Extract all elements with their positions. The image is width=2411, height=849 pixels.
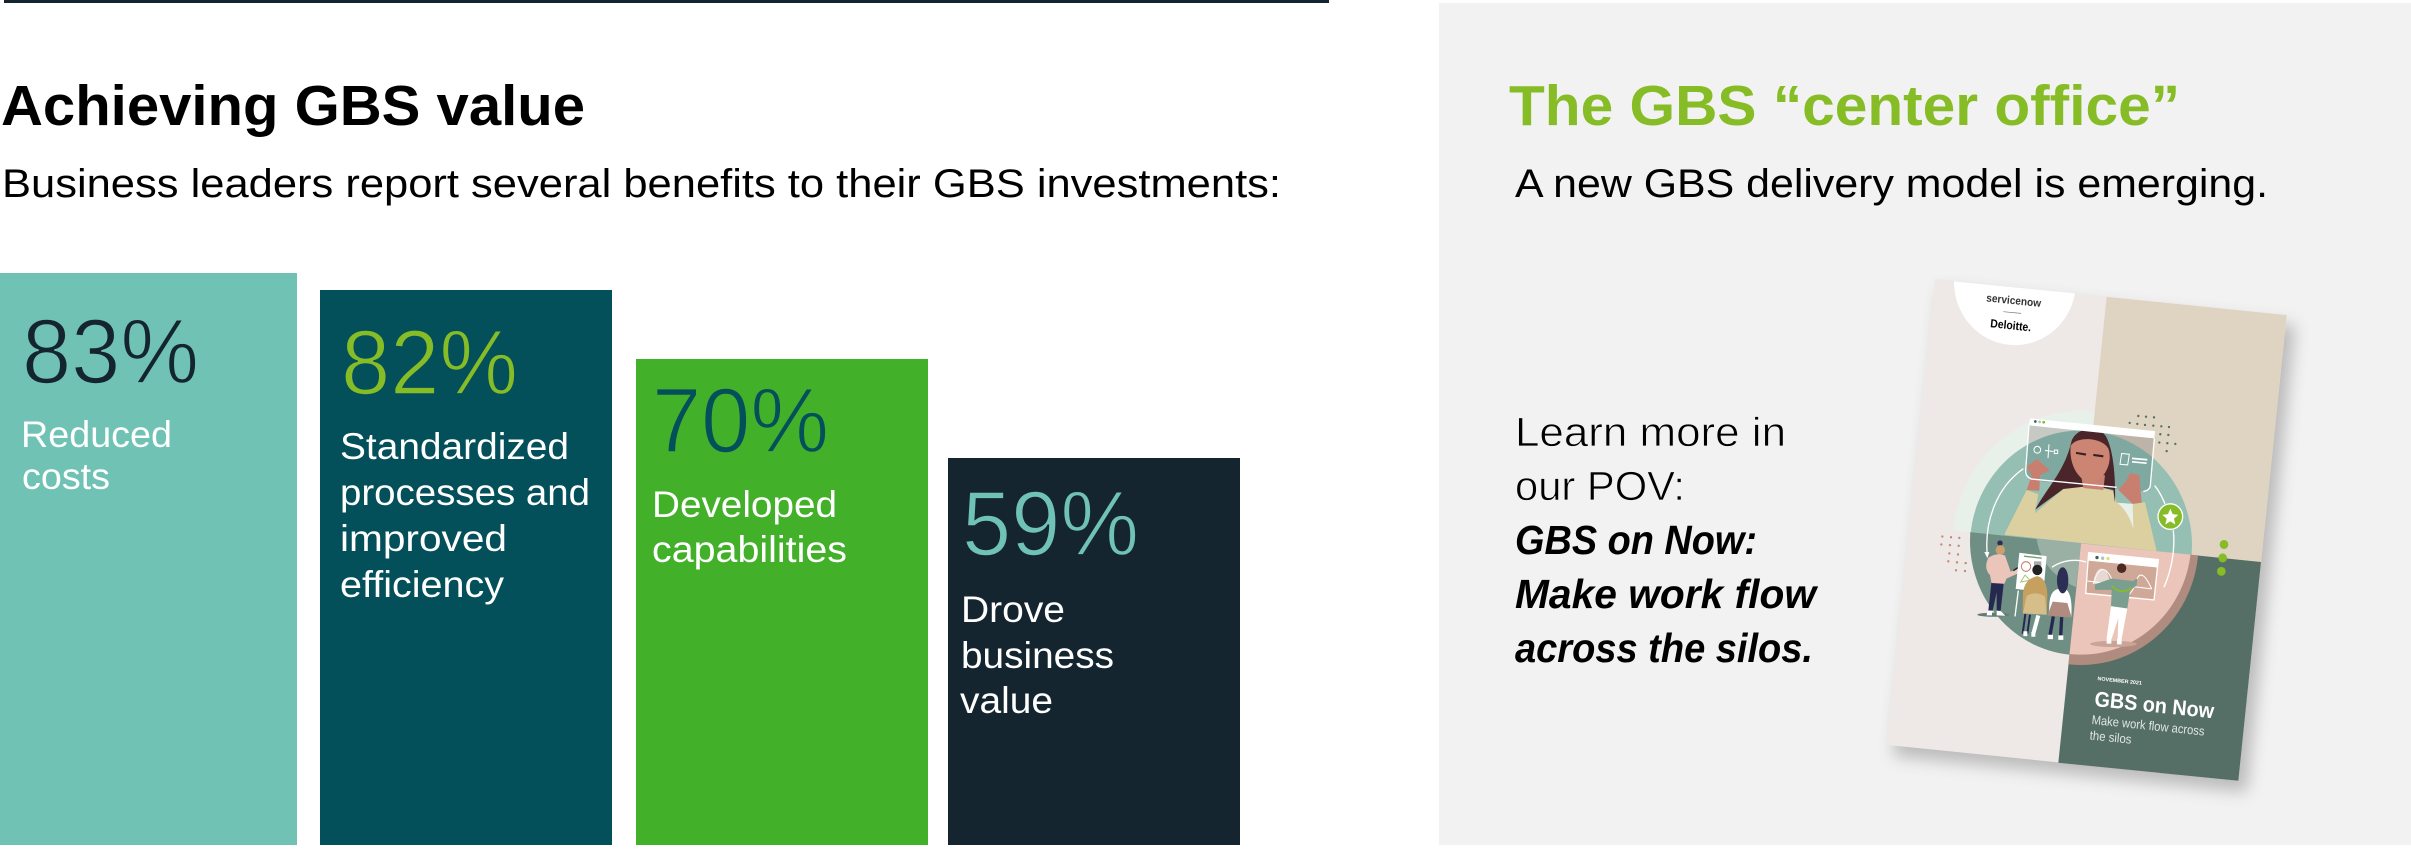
- woman illustration: [2005, 429, 2157, 551]
- bar: 83% reduced costs: 83%: [22, 301, 199, 403]
- gap next to sleeve: [2117, 503, 2133, 529]
- text block: learn more: across the silos.: [1515, 625, 1813, 671]
- bar: 82% standardized processes: processes and: [340, 472, 590, 513]
- bar: 82% standardized processes: efficiency: [340, 564, 505, 605]
- face: [2070, 439, 2110, 483]
- bar: 59% drove business value: 59%: [962, 473, 1139, 575]
- heading: Achieving GBS value: Achieving GBS value: [1, 74, 585, 138]
- tan quadrant: [2081, 297, 2287, 562]
- pink lower right disc: [2070, 544, 2190, 655]
- dark lower left disc: [1970, 532, 2081, 655]
- report cover: [1887, 279, 2295, 792]
- cover text: NOVEMBER 2021: [2097, 676, 2142, 687]
- analyst with chart window: [2086, 553, 2158, 647]
- bar: 59% drove business value: value: [960, 680, 1053, 721]
- neck: [2081, 474, 2105, 490]
- logo area: [1954, 281, 2075, 345]
- cover text: Make work flow across: [2091, 713, 2205, 739]
- bar: 83% reduced costs: costs: [22, 456, 110, 497]
- bar: 83% reduced costs: [0, 273, 297, 845]
- star badge: [2157, 503, 2183, 530]
- bar: 82% standardized processes: improved: [340, 518, 507, 559]
- presenter: [1997, 540, 2003, 546]
- heading: GBS center office: The GBS “center office”: [1509, 74, 2180, 138]
- pale halo: [2093, 414, 2094, 424]
- sweater: [2005, 486, 2157, 551]
- bar: 59% drove business value: Drove: [961, 589, 1065, 630]
- cover text: GBS on Now: [2094, 688, 2216, 723]
- right hand: [2118, 473, 2142, 504]
- eyes: [2076, 453, 2103, 456]
- logo area: Deloitte.: [1990, 318, 2032, 334]
- text block: learn more: [1515, 409, 1819, 671]
- flip chart: [2016, 553, 2047, 592]
- bar: 59% drove business value: [948, 458, 1240, 845]
- text block: learn more: Learn more in: [1515, 409, 1786, 455]
- dark green quadrant: [2058, 543, 2261, 781]
- text block: learn more: GBS on Now:: [1515, 517, 1757, 563]
- bar: 70% developed capabilities: capabilities: [652, 529, 847, 570]
- text block: learn more: our POV:: [1515, 463, 1685, 509]
- bar: 82% standardized processes: 82%: [341, 312, 518, 414]
- bar: 70% developed capabilities: [636, 359, 928, 845]
- text block: learn more: Make work flow: [1515, 571, 1819, 617]
- bar: 82% standardized processes: Standardized: [340, 426, 569, 467]
- dot grid upper right: [2128, 415, 2176, 452]
- teal upper disc: [1970, 430, 2192, 555]
- cover text: [2089, 676, 2216, 747]
- window frame: [2026, 418, 2155, 491]
- bar: 70% developed capabilities: Developed: [652, 484, 837, 525]
- cover text: the silos: [2089, 728, 2132, 747]
- subheading: new delivery model: A new GBS delivery model is emerging.: [1515, 162, 2268, 206]
- bar: 59% drove business value: business: [961, 635, 1114, 676]
- cover page: [1887, 279, 2287, 781]
- rim lower right: [2068, 554, 2198, 665]
- bar: 70% developed capabilities: 70%: [652, 370, 829, 472]
- screen window: [2024, 426, 2154, 491]
- cycle arrows: [1984, 469, 2174, 587]
- seated person two: [2049, 589, 2072, 616]
- light wedge: [2037, 539, 2081, 587]
- cover shadow: [1893, 289, 2295, 792]
- logo area: servicenow: [1986, 292, 2042, 310]
- panel: center office background: [1439, 3, 2411, 845]
- dot grid lower left: [1940, 535, 1967, 572]
- subheading: business leaders: Business leaders report several benefits to their GBS investments:: [2, 162, 1281, 206]
- seated person one: [2032, 565, 2042, 575]
- bar: 82% standardized processes: [320, 290, 612, 845]
- left hand: [2027, 459, 2050, 491]
- certificate icon: [2120, 454, 2147, 465]
- top rule: [4, 0, 1329, 3]
- presenter group: [1977, 540, 2072, 640]
- green dots: [2217, 540, 2228, 576]
- process icon: [2034, 444, 2058, 458]
- hair: [2035, 429, 2115, 510]
- bar: 83% reduced costs: Reduced: [21, 414, 172, 455]
